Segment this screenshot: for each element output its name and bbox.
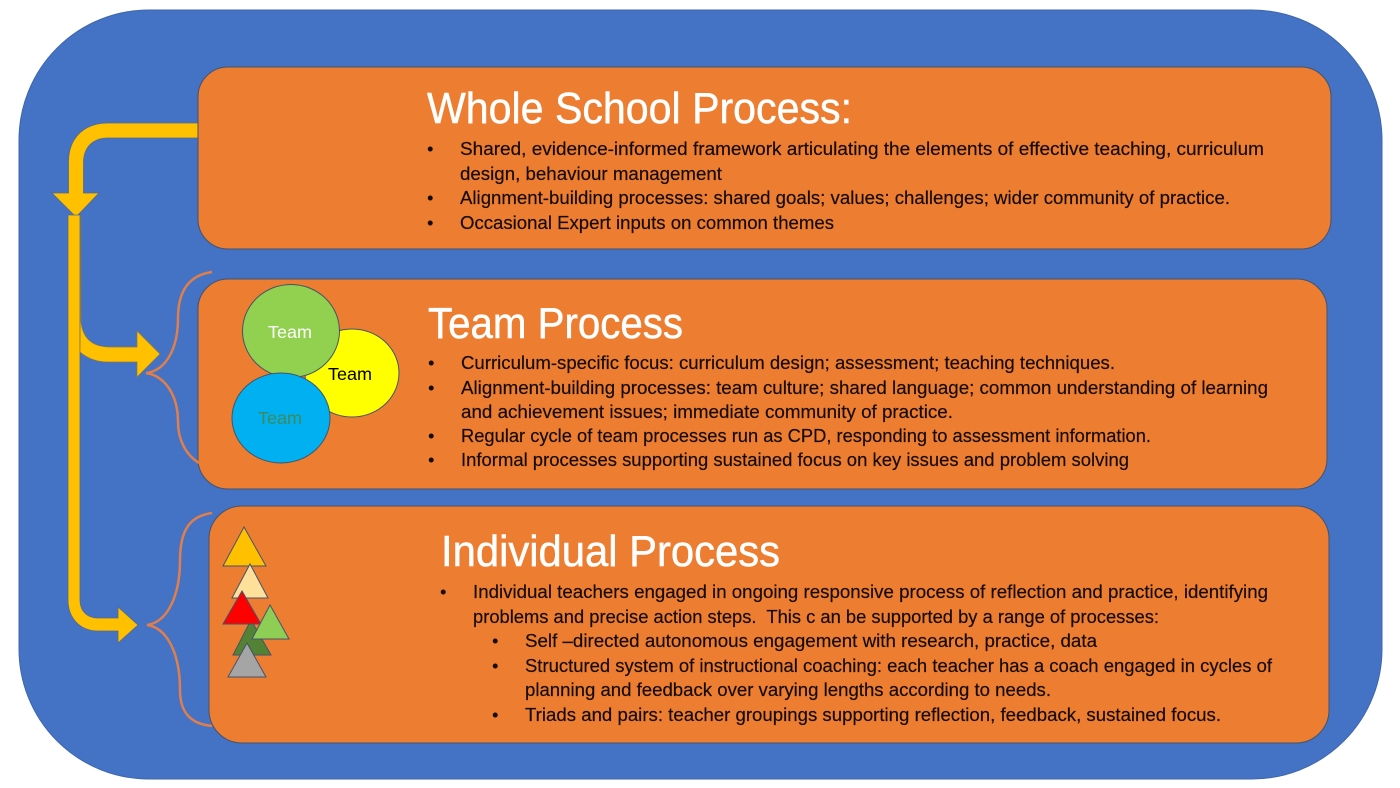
panel: whole school process <box>198 67 1331 249</box>
text block: whole school bullets: • <box>427 138 433 159</box>
brace: individual process <box>147 513 212 726</box>
text block: whole school bullets: Shared, evidence-informed framework articulating the elements of effective teaching, curriculum <box>460 138 1264 159</box>
panel: team process <box>198 279 1327 489</box>
heading: team process: Team Process <box>428 299 683 348</box>
heading: whole school process: Whole School Process: <box>427 84 852 133</box>
text block: team bullets: Alignment-building processes: team culture; shared language; common understanding of learning <box>461 377 1268 398</box>
text block: team bullets: • <box>428 352 434 373</box>
icon: yellow team circle: Team <box>328 364 372 384</box>
brace: team process <box>146 272 212 463</box>
text block: individual bullets: Self –directed autonomous engagement with research, practice, data <box>525 630 1098 651</box>
icon: blue team circle <box>232 373 330 463</box>
icon: blue team circle: Team <box>258 408 302 428</box>
arrow: branch to team process <box>80 215 160 377</box>
text block: individual bullets: • <box>492 630 498 651</box>
text block: individual bullets: • <box>440 581 446 602</box>
text block: whole school bullets: design, behaviour management <box>460 163 722 184</box>
panel: individual process <box>209 506 1329 743</box>
text block: individual bullets: • <box>492 655 498 676</box>
text block: individual bullets: • <box>492 704 498 725</box>
text block: individual bullets: planning and feedback over varying lengths according to needs. <box>525 679 1051 700</box>
text block: individual bullets: problems and precise action steps. This c an be supported by a range of processes: <box>473 606 1159 627</box>
text block: individual bullets: Structured system of instructional coaching: each teacher has a coach engaged in cycles of <box>525 655 1273 676</box>
icon: green team circle <box>242 284 340 378</box>
arrow: down to individual process <box>68 215 138 643</box>
icon: green team circle: Team <box>268 322 312 342</box>
text block: whole school bullets: Occasional Expert inputs on common themes <box>460 212 834 233</box>
text block: team bullets: • <box>428 377 434 398</box>
text block: whole school bullets: • <box>427 212 433 233</box>
arrow: from whole school down <box>52 123 198 217</box>
text block: individual bullets <box>440 581 1273 725</box>
text block: whole school bullets: • <box>427 187 433 208</box>
text block: individual bullets: Triads and pairs: teacher groupings supporting reflection, feedback, sustained focus. <box>525 704 1221 725</box>
icon: team circles <box>232 284 399 463</box>
text block: team bullets <box>428 352 1268 470</box>
text block: team bullets: • <box>428 449 434 470</box>
text block: whole school bullets <box>427 138 1264 233</box>
text block: team bullets: and achievement issues; immediate community of practice. <box>461 401 953 422</box>
text block: team bullets: Regular cycle of team processes run as CPD, responding to assessment information. <box>461 425 1151 446</box>
text block: team bullets: Curriculum-specific focus: curriculum design; assessment; teaching techniques. <box>461 352 1115 373</box>
text block: team bullets: • <box>428 425 434 446</box>
icon: yellow team circle <box>305 329 399 417</box>
text block: whole school bullets: Alignment-building processes: shared goals; values; challenges; wider community of practice. <box>460 187 1230 208</box>
text block: individual bullets: Individual teachers engaged in ongoing responsive process of reflection and practice, identifying <box>473 581 1268 602</box>
icon: triangles <box>223 527 289 677</box>
heading: individual process: Individual Process <box>441 527 780 576</box>
text block: team bullets: Informal processes supporting sustained focus on key issues and problem solving <box>461 449 1129 470</box>
